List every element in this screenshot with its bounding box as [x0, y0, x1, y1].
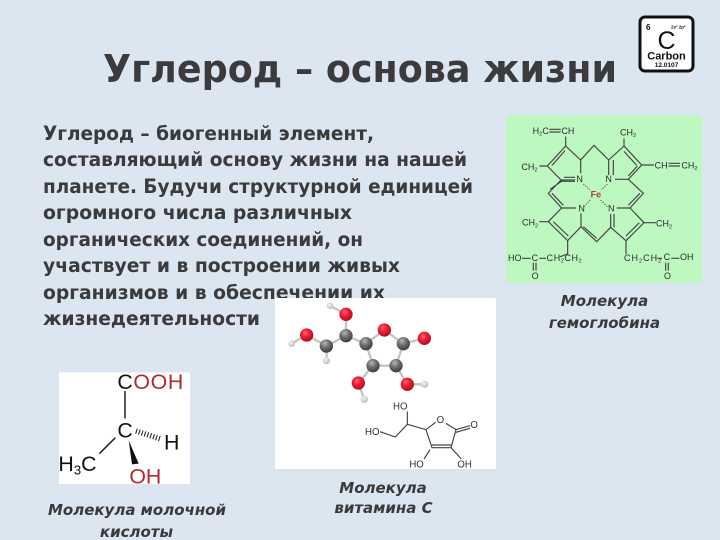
hemoglobin labels: CH	[564, 253, 578, 263]
panel: lactic acid molecule	[58, 370, 190, 488]
caption: vitamin C	[334, 479, 433, 517]
hemoglobin labels: 2	[633, 133, 636, 139]
caption: vitamin C: витамина С	[334, 499, 433, 517]
panel: vitamin C molecule	[275, 298, 496, 470]
structural formula: OH	[457, 459, 472, 470]
hemoglobin bonds	[522, 129, 680, 271]
ball and stick atoms	[288, 302, 431, 403]
hemoglobin labels: OH	[680, 252, 693, 262]
hemoglobin labels: 2	[658, 259, 661, 265]
hemoglobin labels: C	[664, 252, 671, 262]
hemoglobin labels: C	[542, 126, 549, 136]
panel: lactic acid molecule: OH	[129, 464, 161, 488]
structural formula: O	[470, 420, 478, 431]
hemoglobin labels	[508, 126, 697, 281]
hemoglobin labels: CH	[656, 219, 669, 229]
hemoglobin labels: N	[576, 174, 583, 184]
hemoglobin labels: CH	[643, 253, 657, 263]
hemoglobin labels: N	[608, 203, 614, 213]
icon: carbon element tile: 12.0107	[655, 62, 679, 69]
hemoglobin labels: CH	[655, 160, 668, 170]
structural formula: HO	[365, 427, 380, 438]
panel: lactic acid molecule: C	[117, 370, 133, 394]
hemoglobin labels: CH	[522, 218, 535, 228]
structural formula: O	[437, 415, 445, 426]
panel: lactic acid molecule: 3	[74, 462, 81, 477]
hemoglobin labels: CH	[521, 162, 534, 172]
icon: carbon element tile	[640, 17, 693, 71]
icon: carbon element tile: C	[657, 27, 676, 55]
hemoglobin labels: CH	[624, 253, 638, 263]
hemoglobin labels: O	[664, 271, 671, 281]
panel: lactic acid molecule: H	[58, 452, 74, 476]
icon: carbon element tile: 6	[646, 23, 651, 32]
body text: жизнедеятельности	[43, 307, 260, 330]
hemoglobin labels: 2	[669, 224, 672, 230]
hemoglobin labels: O	[532, 271, 539, 281]
caption: hemoglobin: гемоглобина	[549, 314, 660, 332]
hemoglobin labels: C	[532, 253, 539, 263]
structural formula: HO	[393, 402, 408, 413]
body text: составляющий основу жизни на нашей	[43, 148, 467, 171]
panel: lactic acid molecule: C	[81, 452, 97, 476]
body text: органических соединений, он	[43, 228, 363, 251]
hemoglobin labels: CH	[681, 160, 694, 170]
hemoglobin labels: 2	[561, 259, 564, 265]
caption: lactic acid: Молекула молочной	[48, 501, 226, 519]
icon: carbon element tile: 2s² 2p²	[671, 24, 686, 30]
caption: lactic acid	[48, 501, 226, 540]
hemoglobin labels: Fe	[591, 189, 601, 199]
body text: планете. Будучи структурной единицей	[43, 175, 473, 198]
body text: организмов и в обеспечении их	[43, 281, 385, 304]
hemoglobin labels: 2	[579, 259, 582, 265]
hemoglobin labels: CH	[547, 253, 560, 263]
hemoglobin labels: CH	[620, 127, 633, 137]
panel: hemoglobin molecule	[506, 115, 702, 283]
structural formula: HO	[409, 459, 424, 470]
caption: hemoglobin: Молекула	[561, 292, 648, 310]
body text: Углерод – биогенный элемент,	[43, 122, 374, 145]
body text	[43, 122, 473, 330]
hemoglobin labels: 2	[535, 223, 538, 229]
body text: огромного числа различных	[43, 201, 352, 224]
hemoglobin labels: N	[578, 203, 585, 213]
panel: lactic acid molecule: C	[117, 419, 133, 443]
hemoglobin labels: CH	[561, 126, 574, 136]
hemoglobin labels: 2	[639, 259, 642, 265]
hemoglobin labels: 2	[534, 168, 537, 174]
hemoglobin labels: 2	[694, 166, 697, 172]
caption: vitamin C: Молекула	[339, 479, 427, 497]
ball and stick bonds	[292, 306, 425, 399]
body text: участвует и в построении живых	[43, 254, 400, 277]
hemoglobin labels: N	[605, 174, 612, 184]
panel: lactic acid molecule: H	[164, 431, 179, 455]
hemoglobin labels: 2	[539, 132, 542, 138]
caption: hemoglobin	[549, 292, 660, 332]
icon: carbon element tile: Carbon	[647, 50, 686, 62]
title: Углерод – основа жизни	[103, 47, 617, 91]
panel: lactic acid molecule: OOH	[133, 370, 183, 394]
hemoglobin labels: H	[533, 126, 539, 136]
structural formula	[365, 402, 478, 470]
hemoglobin labels: HO	[508, 253, 521, 263]
